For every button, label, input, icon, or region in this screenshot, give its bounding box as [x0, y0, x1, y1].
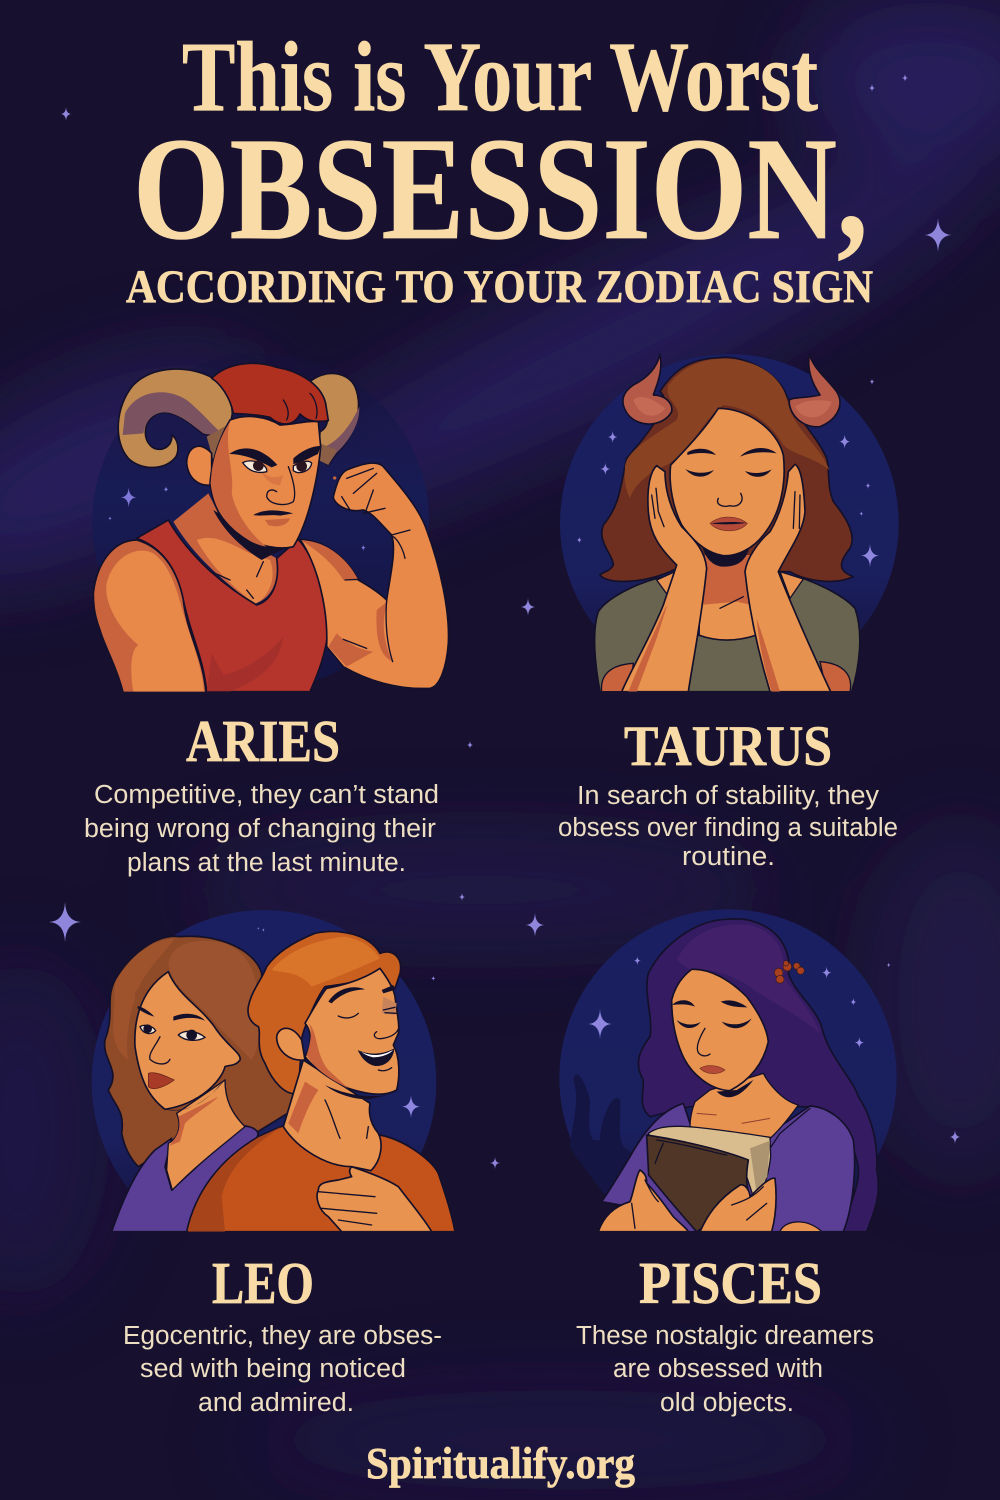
face	[213, 510, 285, 560]
shirt	[602, 1103, 855, 1232]
neck	[173, 493, 277, 604]
nose and mouth	[267, 467, 295, 504]
collarbone	[720, 597, 743, 608]
woman's purple top	[112, 1126, 258, 1232]
hands	[598, 1170, 688, 1232]
description: Aries: being wrong of changing their	[84, 815, 437, 843]
upper hair	[625, 359, 829, 498]
shirt	[595, 575, 860, 692]
description: Aries: Competitive, they can’t stand	[94, 781, 439, 809]
right horn	[310, 373, 359, 465]
horns	[623, 354, 672, 424]
seaweed silhouette	[570, 1074, 632, 1194]
description: Pisces: are obsessed with	[613, 1355, 823, 1383]
face	[717, 1080, 753, 1097]
illustration: Leo woman and smiling man back to back	[92, 910, 455, 1255]
old book	[648, 1126, 771, 1197]
left horn	[118, 369, 232, 467]
description: Pisces: old objects.	[660, 1389, 794, 1417]
fist accent	[333, 476, 336, 480]
description: Leo: sed with being noticed	[140, 1355, 406, 1383]
description: Pisces	[576, 1322, 874, 1417]
description: Pisces: These nostalgic dreamers	[576, 1322, 874, 1350]
illustration: Aries ram-horned man flexing	[92, 353, 449, 693]
heading: TAURUS: TAURUS	[624, 715, 832, 778]
ear	[187, 446, 212, 485]
right arm	[300, 463, 449, 689]
description: Aries	[84, 781, 439, 877]
illustration: Pisces dreamer hugging an old book	[559, 909, 897, 1247]
heading: ARIES: ARIES	[186, 708, 340, 774]
description: Taurus: obsess over finding a suitable	[558, 814, 898, 842]
man's neck and shirt	[187, 1125, 455, 1232]
description: Leo: Egocentric, they are obses-	[123, 1322, 442, 1350]
title line 1: This is Your Worst	[182, 21, 818, 132]
description: Leo: and admired.	[198, 1389, 354, 1417]
left shoulder	[93, 540, 206, 693]
tank top	[137, 520, 328, 692]
title line 3: subtitle: ACCORDING TO YOUR ZODIAC SIGN	[126, 261, 873, 313]
long hair back	[600, 357, 853, 581]
description: Leo	[123, 1322, 442, 1417]
hair	[638, 919, 878, 1232]
description: Taurus	[558, 782, 898, 871]
heading: LEO: LEO	[212, 1250, 314, 1316]
description: Taurus: In search of stability, they	[577, 782, 879, 810]
title	[126, 21, 873, 313]
woman's hair	[105, 936, 299, 1167]
panel: Aries	[84, 353, 449, 877]
hands and forearms	[622, 466, 707, 692]
neck	[703, 555, 750, 605]
title line 2: OBSESSION: OBSESSION,	[133, 107, 868, 270]
face	[702, 548, 749, 567]
footer: site name: Spiritualify.org	[366, 1439, 635, 1488]
description: Taurus: routine.	[682, 843, 775, 871]
panel: Leo	[92, 910, 455, 1417]
neck and chest	[690, 1073, 798, 1140]
hair berries	[774, 961, 804, 983]
eyes and brows	[229, 446, 321, 467]
woman's neck	[167, 1080, 245, 1190]
description: Aries: plans at the last minute.	[127, 849, 406, 877]
hair	[212, 363, 328, 424]
illustration: Taurus bull-horned woman holding her face	[560, 354, 899, 693]
woman's face	[162, 1080, 225, 1111]
man's face	[325, 1085, 395, 1099]
heading: PISCES: PISCES	[639, 1250, 822, 1316]
panel: Taurus	[558, 354, 899, 871]
brows, lids, nose, lips	[687, 448, 777, 457]
panel: Pisces	[559, 909, 897, 1417]
man's hand on chest	[317, 1167, 432, 1232]
man's hair	[248, 932, 401, 1094]
